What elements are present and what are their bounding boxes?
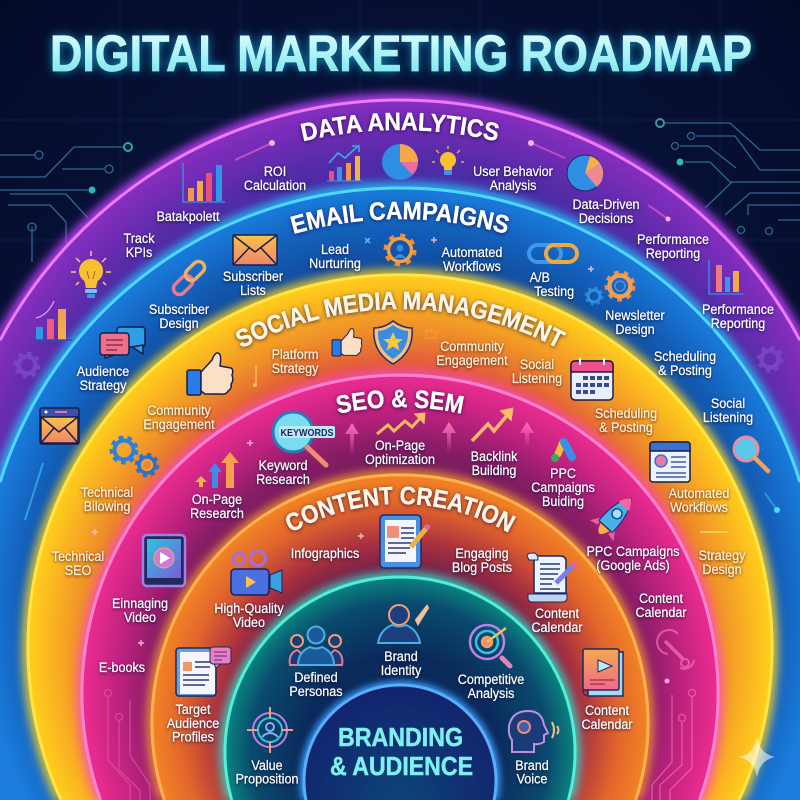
- label: content calendar book: Calendar: [581, 716, 633, 732]
- label: value proposition: Proposition: [236, 771, 298, 787]
- label: ppc campaigns google ads: (Google Ads): [596, 557, 670, 573]
- icon: light bulb small: [432, 146, 464, 175]
- icon: competitive analysis target: [470, 625, 510, 666]
- icon: book: [583, 649, 623, 696]
- icon: video camera: [231, 550, 282, 595]
- circuit decoration: bottom right pink: [652, 690, 696, 800]
- icon: envelope email: [233, 235, 277, 265]
- label: brand voice: Voice: [517, 771, 547, 787]
- label: scheduling and posting yellow: & Posting: [599, 419, 653, 435]
- label: track kpis: KPIs: [126, 244, 153, 260]
- label: roi calculation: ROI: [264, 163, 286, 179]
- icon: scroll and pen: [527, 553, 576, 602]
- label: content calendar scroll: Content: [535, 605, 579, 621]
- icon: browser window: [650, 442, 690, 482]
- ring: branding core: [304, 685, 496, 800]
- label: infographics: Infographics: [291, 545, 360, 561]
- icon: magnifier right: [734, 437, 768, 471]
- label: audience strategy: Strategy: [80, 377, 127, 393]
- label: social listening blue: Social: [711, 395, 745, 411]
- heading: branding and audience: & AUDIENCE: [330, 751, 473, 781]
- ring: seo and sem: [82, 375, 718, 800]
- icon: pink up arrow left: [345, 423, 359, 455]
- icon: trend arrow small: [377, 413, 425, 434]
- label: scheduling and posting yellow: Scheduling: [595, 405, 657, 421]
- icon: thumbs up large: [187, 353, 233, 395]
- label: defined personas: Personas: [289, 683, 343, 699]
- icon: gears technical: [112, 438, 157, 475]
- label: competitive analysis: Analysis: [468, 685, 515, 701]
- label: target audience profiles: Audience: [167, 715, 219, 731]
- icon: left bars: [30, 301, 72, 340]
- label: audience strategy: Audience: [77, 363, 129, 379]
- heading: content creation: CONTENT CREATION: [283, 484, 518, 536]
- icon: gear email center: [386, 236, 414, 264]
- icon: bar chart: [183, 163, 225, 202]
- label: content calendar pink: Calendar: [635, 604, 687, 620]
- label: high-quality video: High-Quality: [214, 600, 284, 616]
- label: social listening yellow: Listening: [512, 370, 562, 386]
- label: roi calculation: Calculation: [244, 177, 306, 193]
- icon: trend arrow large: [472, 408, 513, 441]
- label: keyword research: Keyword: [259, 457, 307, 473]
- label: brand identity: Brand: [384, 648, 418, 664]
- label: social listening blue: Listening: [703, 409, 753, 425]
- label: defined personas: Defined: [294, 669, 338, 685]
- icon: brand voice head: [509, 711, 558, 752]
- icon: pink up arrow middle: [442, 422, 456, 453]
- label: einnaging video: Einnaging: [112, 595, 168, 611]
- label: content calendar scroll: Calendar: [531, 619, 583, 635]
- label: lead nurturing: Nurturing: [309, 255, 361, 271]
- icon: envelope window: [40, 408, 79, 444]
- icon: rocket: [587, 487, 643, 544]
- label: high-quality video: Video: [233, 614, 265, 630]
- label: user behavior analysis: User Behavior: [473, 163, 553, 179]
- label: community engagement center: Engagement: [436, 352, 508, 368]
- label: ppc campaigns building: Buiding: [542, 493, 584, 509]
- label: scheduling and posting blue: Scheduling: [654, 348, 716, 364]
- label: content calendar book: Content: [585, 702, 629, 718]
- label: engaging blog posts: Engaging: [455, 545, 509, 561]
- ring: email campaigns: [0, 188, 800, 800]
- ring: social media management: [28, 275, 772, 800]
- heading: seo and sem: SEO & SEM: [334, 388, 466, 417]
- heading: data analytics: DATA ANALYTICS: [298, 111, 501, 144]
- label: target audience profiles: Target: [176, 701, 211, 717]
- label: community engagement left: Engagement: [143, 416, 215, 432]
- label: platform strategy: Strategy: [272, 360, 319, 376]
- icon: performance bars: [709, 260, 743, 294]
- label: strategy design: Strategy: [699, 547, 746, 563]
- label: platform strategy: Platform: [272, 346, 318, 362]
- label: ppc campaigns google ads: PPC Campaigns: [587, 543, 680, 559]
- heading: branding and audience: BRANDING: [338, 722, 463, 752]
- label: data-driven decisions: Decisions: [579, 210, 634, 226]
- label: technical bilowing: Technical: [81, 484, 133, 500]
- label: performance reporting lower: Performance: [702, 301, 774, 317]
- circuit decoration: top right: [656, 119, 800, 234]
- label: value proposition: Value: [251, 757, 283, 773]
- label: automated workflows: Automated: [442, 244, 502, 260]
- label: competitive analysis: Competitive: [458, 671, 524, 687]
- icon: gear dim right: [759, 348, 781, 370]
- icon: dim key: [657, 630, 694, 669]
- label: performance reporting upper: Reporting: [646, 245, 700, 261]
- heading: branding and audience: [330, 722, 473, 781]
- label: performance reporting lower: Reporting: [711, 315, 765, 331]
- label: brand voice: Brand: [515, 757, 549, 773]
- label: track kpis: Track: [124, 230, 155, 246]
- circuit decoration: bottom left pink: [104, 690, 150, 800]
- label: subscriber design: Design: [159, 315, 199, 331]
- heading: social media management: SOCIAL MEDIA MANAGEMENT: [233, 290, 568, 350]
- label: community engagement left: Community: [147, 402, 211, 418]
- icon: document tablet: [380, 515, 429, 568]
- ring: branding and audience outer: [225, 577, 575, 800]
- label: scheduling and posting blue: & Posting: [658, 362, 712, 378]
- label: automated workflows yellow: Workflows: [670, 499, 728, 515]
- label: newsletter design: Newsletter: [605, 307, 665, 323]
- label: einnaging video: Video: [124, 609, 156, 625]
- icon: shield: [374, 321, 412, 364]
- label: technical bilowing: Bilowing: [84, 498, 130, 514]
- label: on-page research: On-Page: [192, 491, 242, 507]
- label: ppc campaigns building: PPC: [550, 465, 576, 481]
- icon: google ads: [551, 442, 572, 462]
- label: subscriber lists: Lists: [240, 282, 266, 298]
- icon: document with chat: [176, 647, 231, 696]
- label: batakpolett: Batakpolett: [157, 208, 220, 224]
- label: community engagement center: Community: [440, 338, 504, 354]
- label: target audience profiles: Profiles: [172, 729, 214, 745]
- icon: pie chart large: [567, 155, 603, 191]
- icon: pink up arrow right: [520, 422, 534, 447]
- icon: keywords magnifier: [273, 412, 335, 465]
- label: e-books: E-books: [99, 659, 145, 675]
- icon: chat bubbles: [100, 327, 145, 358]
- icon: calendar: [571, 358, 613, 400]
- icon: trend chart: [327, 146, 362, 181]
- icon: gear dim left: [16, 354, 38, 376]
- icon: gears newsletter: [586, 273, 633, 304]
- label: subscriber lists: Subscriber: [223, 268, 284, 284]
- icon: defined personas: [290, 626, 342, 665]
- label: social listening yellow: Social: [520, 356, 554, 372]
- icon: chain link horizontal: [529, 245, 577, 262]
- icon: light bulb large: [71, 251, 111, 298]
- label: on-page research: Research: [190, 505, 244, 521]
- icon: tablet: [143, 535, 185, 586]
- heading: email campaigns: EMAIL CAMPAIGNS: [288, 200, 512, 237]
- star watermark: [739, 737, 775, 777]
- icon: chain link diagonal: [171, 259, 207, 297]
- label: lead nurturing: Lead: [321, 241, 349, 257]
- label: backlink building: Building: [472, 462, 516, 478]
- label: on-page optimization: Optimization: [365, 451, 435, 467]
- label: newsletter design: Design: [615, 321, 655, 337]
- label: a/b testing: Testing: [534, 283, 574, 299]
- icon: brand identity: [378, 605, 428, 643]
- label: a/b testing: A/B: [530, 269, 550, 285]
- label: data-driven decisions: Data-Driven: [572, 196, 640, 212]
- label: brand identity: Identity: [381, 662, 422, 678]
- icon: value proposition: [247, 707, 293, 753]
- label: backlink building: Backlink: [471, 448, 518, 464]
- icon: up arrows research: [195, 452, 239, 488]
- decorative sparkles and streaks: [25, 140, 780, 684]
- label: user behavior analysis: Analysis: [490, 177, 537, 193]
- label: automated workflows: Workflows: [443, 258, 501, 274]
- circuit decoration: top left: [0, 143, 132, 262]
- label: automated workflows yellow: Automated: [669, 485, 729, 501]
- label: content calendar pink: Content: [639, 590, 683, 606]
- label: on-page optimization: On-Page: [375, 437, 425, 453]
- label: keyword research: Research: [256, 471, 310, 487]
- label: subscriber design: Subscriber: [149, 301, 210, 317]
- label: engaging blog posts: Blog Posts: [452, 559, 512, 575]
- icon: thumbs up small: [332, 329, 362, 356]
- ring: content creation: [152, 475, 648, 800]
- label: technical seo: Technical: [52, 548, 104, 564]
- label: performance reporting upper: Performance: [637, 231, 709, 247]
- icon: pie chart small: [382, 144, 418, 180]
- label: strategy design: Design: [702, 561, 742, 577]
- label: ppc campaigns building: Campaigns: [531, 479, 595, 495]
- icon: keywords magnifier: KEYWORDS: [280, 427, 334, 439]
- label: technical seo: SEO: [65, 562, 91, 578]
